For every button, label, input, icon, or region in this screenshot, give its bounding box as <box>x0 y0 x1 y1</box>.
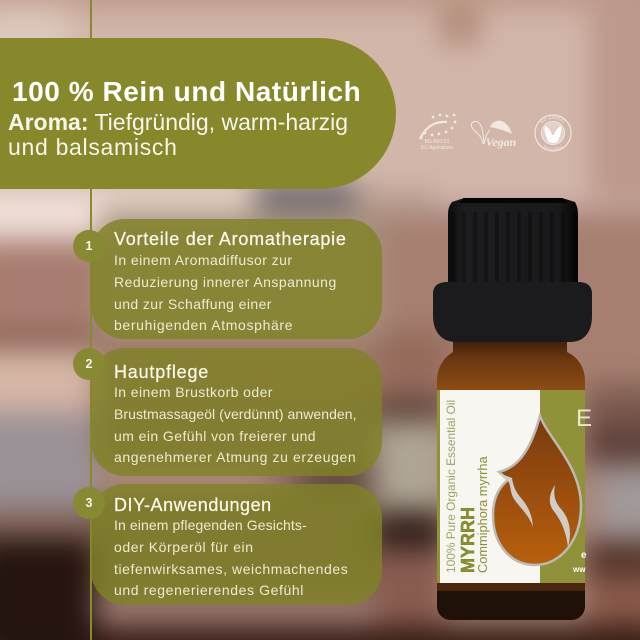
icon: no animal testing: TESTING <box>544 145 563 150</box>
bottle glass <box>437 340 585 620</box>
text 1: In einem Aromadiffusor zur <box>114 252 292 268</box>
heading 1: Vorteile der Aromatherapie <box>114 229 347 249</box>
heading 2: Hautpflege <box>114 362 209 382</box>
number 3 <box>73 487 105 519</box>
aroma description: Aroma: Tiefgründig, warm-harzig <box>8 109 348 135</box>
text 3 <box>114 517 348 598</box>
text 3: tiefenwirksames, weichmachendes <box>114 561 348 577</box>
text 2: Brustmassageöl (verdünnt) anwenden, <box>114 406 357 422</box>
vertical timeline line <box>90 0 92 640</box>
heading 3: DIY-Anwendungen <box>114 495 272 515</box>
aroma description: und balsamisch <box>8 134 178 160</box>
text 2 <box>114 384 357 465</box>
text 1: Reduzierung innerer Anspannung <box>114 274 337 290</box>
text 1: und zur Schaffung einer <box>114 296 272 312</box>
text 2: In einem Brustkorb oder <box>114 384 273 400</box>
number 1 <box>73 230 105 262</box>
product label <box>437 390 592 583</box>
text 2: um ein Gefühl von freierer und <box>114 428 316 444</box>
icon: vegan: Vegan <box>486 135 517 149</box>
label brand: E <box>576 405 592 432</box>
icon: no animal testing: NO ANIMAL <box>540 116 564 124</box>
number 2: 2 <box>86 357 92 371</box>
number 2 <box>73 348 105 380</box>
aroma description <box>8 109 348 160</box>
title: 100 % Rein und Natürlich <box>12 76 361 107</box>
text 1: beruhigenden Atmosphäre <box>114 317 293 333</box>
label droplet <box>493 416 581 565</box>
certification icons <box>419 114 572 152</box>
number 1: 1 <box>86 239 92 253</box>
text 1 <box>114 252 337 333</box>
product label: ww <box>572 565 586 574</box>
bottle cap <box>433 198 592 342</box>
icon: vegan <box>471 121 517 149</box>
panel: Hautpflege card <box>91 348 382 476</box>
icon: EU organic leaf: BG-BIO-21 <box>425 139 450 145</box>
icon: no animal testing <box>534 114 572 152</box>
product bottle <box>433 198 592 620</box>
label vertical text: MYRRH <box>458 507 478 573</box>
label vertical text <box>444 400 490 573</box>
panel: DIY card <box>91 484 382 605</box>
panel: Aromatherapie card <box>91 219 382 339</box>
icon: EU organic leaf <box>420 114 456 151</box>
text 2: angenehmerer Atmung zu erzeugen <box>114 449 356 465</box>
text 3: oder Körperöl für ein <box>114 539 254 555</box>
header panel <box>0 38 396 189</box>
label vertical text: 100% Pure Organic Essential Oil <box>444 400 458 573</box>
label vertical text: Commiphora myrrha <box>475 455 490 573</box>
icon: EU organic leaf: EU Agriculture <box>421 145 453 151</box>
number 3: 3 <box>86 496 92 510</box>
text 3: und regenerierendes Gefühl <box>114 582 304 598</box>
label small text: e <box>581 550 587 561</box>
text 3: In einem pflegenden Gesichts- <box>114 517 307 533</box>
